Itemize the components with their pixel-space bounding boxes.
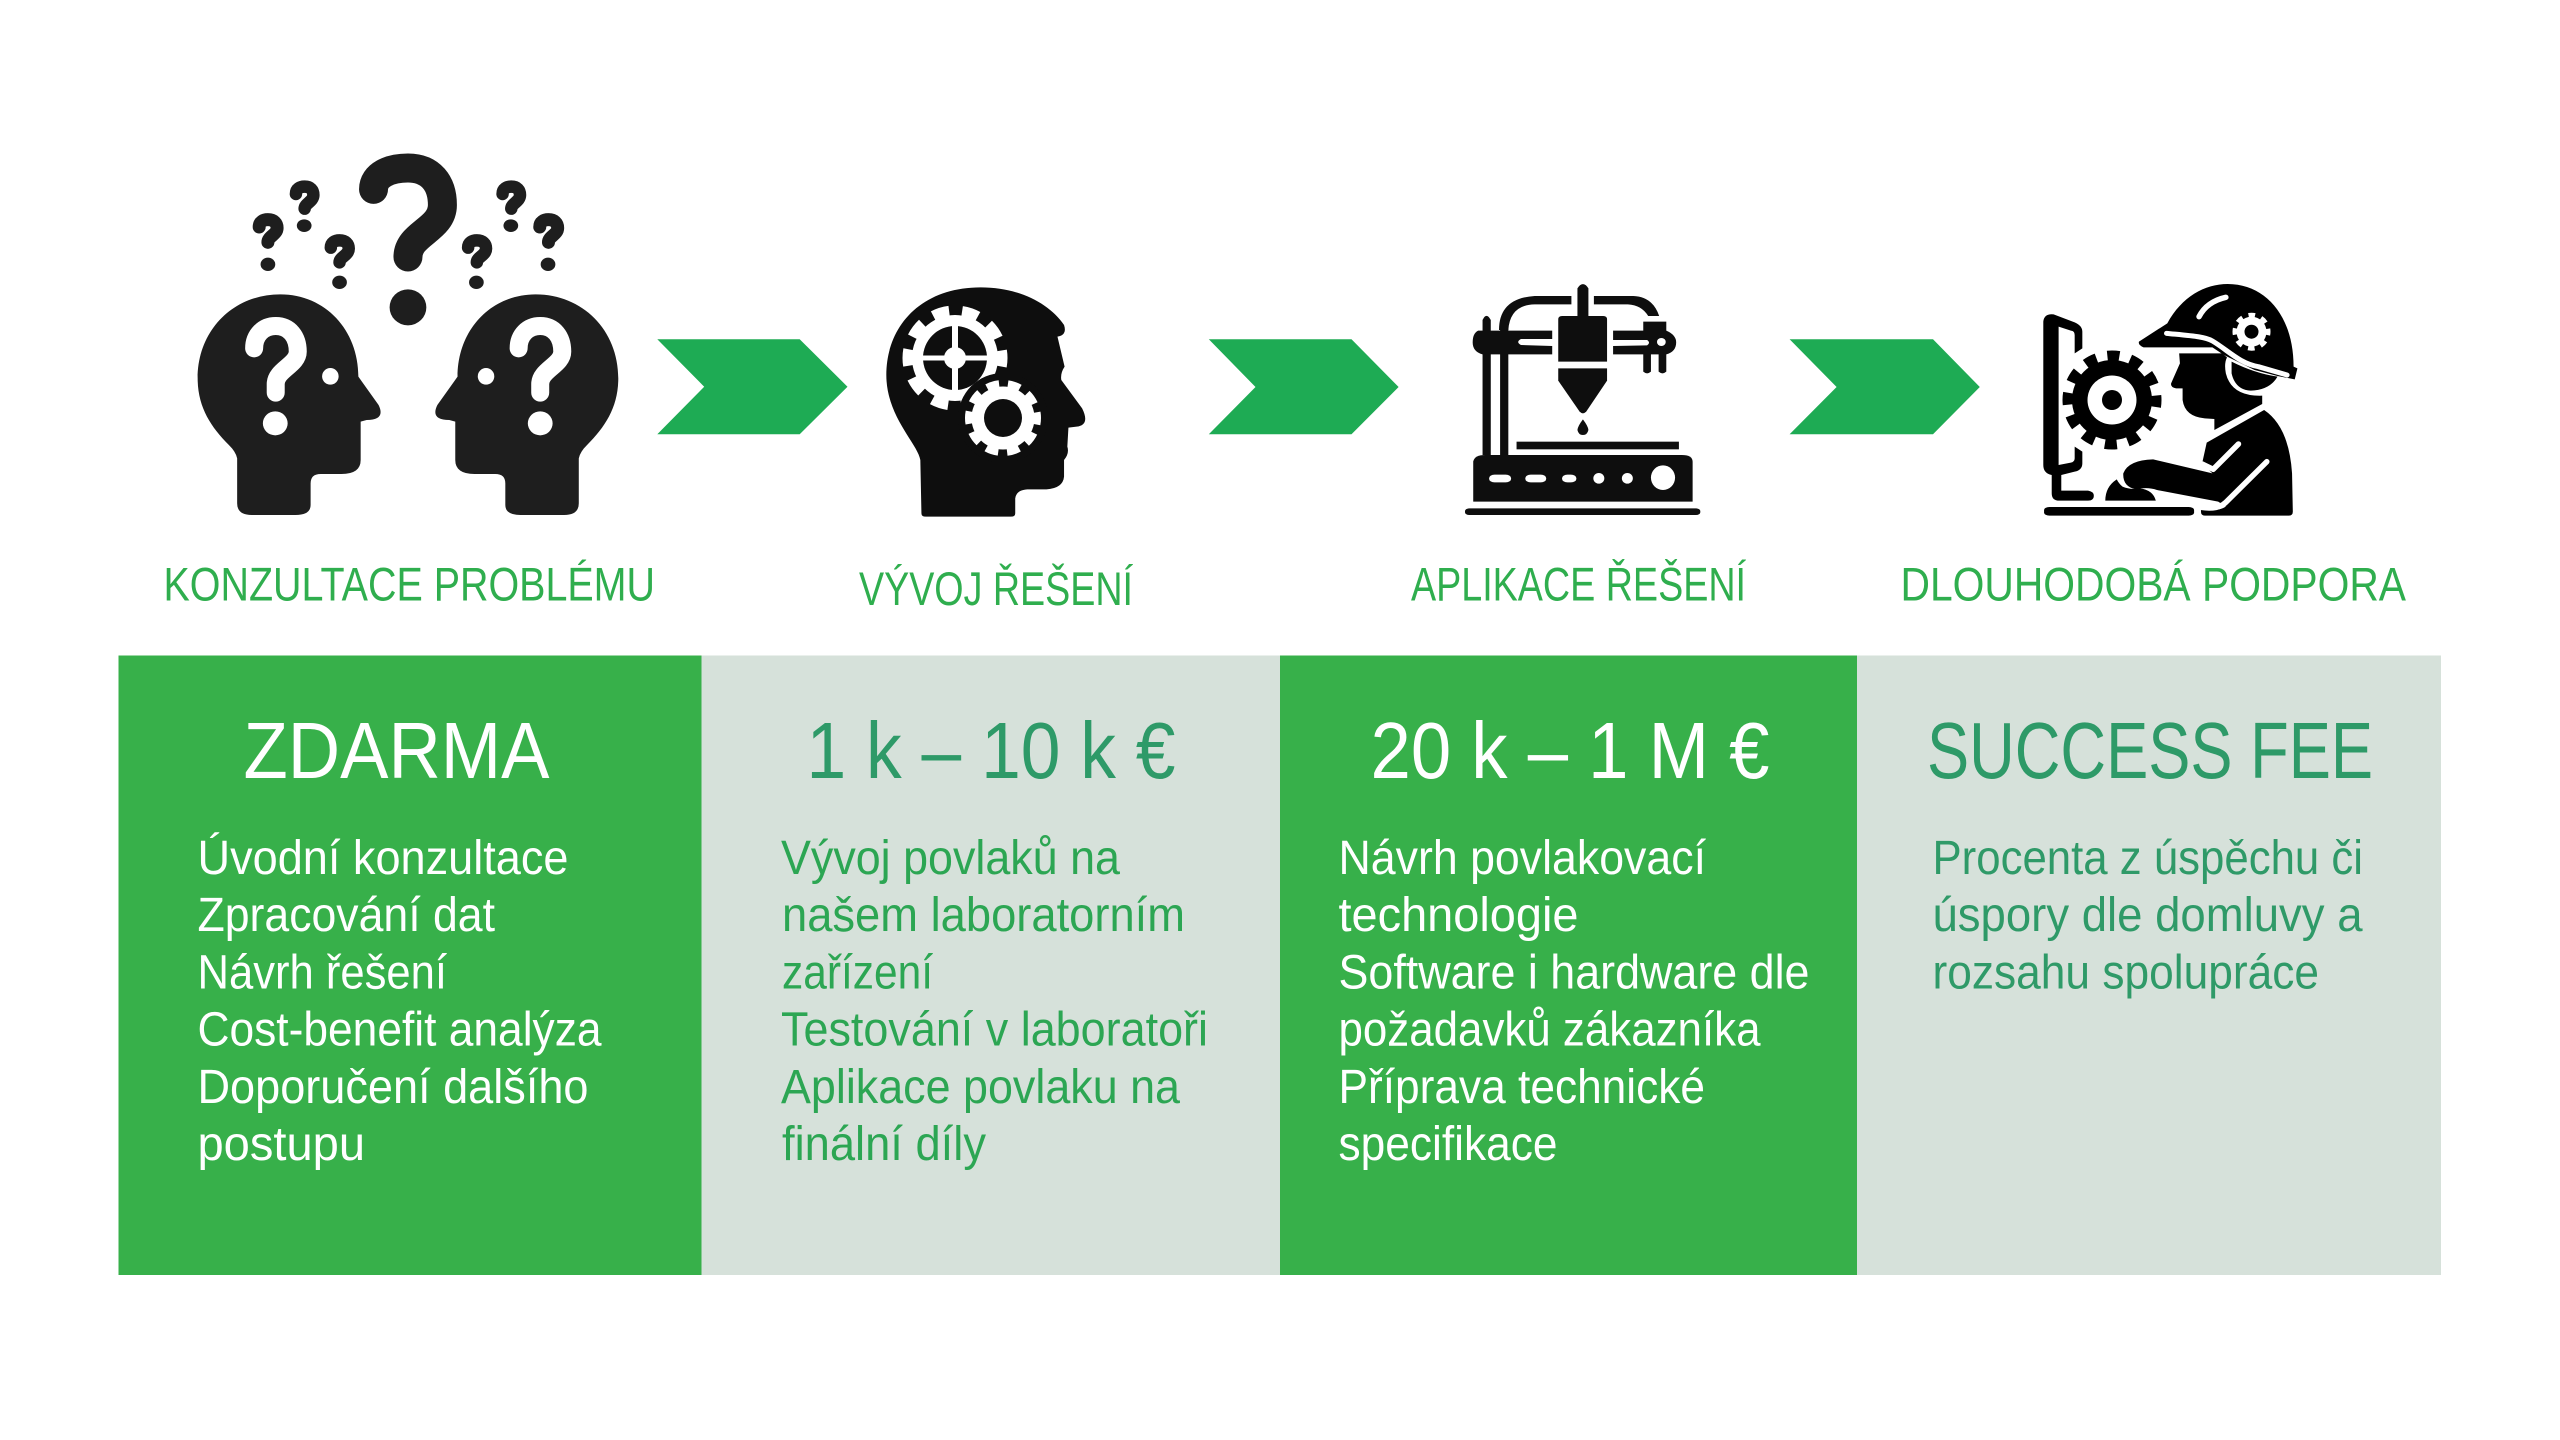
services list: Návrh řešení [198,946,448,999]
terms text [1932,832,2363,999]
figure with helmet [2105,284,2297,516]
arrow: step 3 to 4 [1790,339,1980,434]
right head [435,294,618,515]
services list: Vývoj povlaků na [781,832,1120,885]
price heading: 1 k – 10 k € [806,706,1176,795]
helmet gear [2236,316,2268,348]
services list [198,831,602,1171]
print bed [1517,442,1679,449]
panel: success fee [1857,656,2441,1275]
arrow: step 1 to 2 [657,339,848,434]
large question mark [374,168,442,325]
services list: Návrh povlakovací [1338,832,1707,885]
arrow: step 2 to 3 [1209,339,1399,434]
label: KONZULTACE PROBLÉMU: KONZULTACE PROBLÉMU [164,558,655,610]
services list [781,832,1208,1171]
services list: požadavků zákazníka [1338,1004,1761,1057]
head silhouette [886,287,1085,517]
services list: Software i hardware dle [1338,946,1810,999]
large gear [908,311,1002,405]
terms text: úspory dle domluvy a [1932,889,2363,942]
monitor and keyboard [2043,314,2194,516]
price heading: 20 k – 1 M € [1370,706,1770,795]
icon: head with gears [886,287,1085,517]
gear on screen [2068,356,2156,444]
services list: Testování v laboratoři [781,1004,1208,1057]
icon: 3D printer [1465,284,1700,515]
price heading: ZDARMA [244,706,550,795]
print head and nozzle [1558,284,1607,435]
printer base [1465,455,1700,515]
icon: engineer at computer [2043,284,2297,516]
panel: 20k-1M [1280,656,1857,1275]
icon: two heads with question marks [198,168,618,515]
services list: Příprava technické [1338,1061,1705,1114]
panel: 1k-10k [702,656,1280,1275]
services list: našem laboratorním [782,889,1185,942]
services list: technologie [1338,889,1578,942]
left head [198,294,381,515]
services list: Cost-benefit analýza [198,1004,602,1057]
services list [1338,832,1810,1171]
small question marks [259,187,558,289]
services list: finální díly [782,1118,986,1171]
frame and gantry [1473,296,1676,455]
terms text: rozsahu spolupráce [1932,946,2319,999]
services list: Zpracování dat [198,889,495,942]
price heading: SUCCESS FEE [1927,706,2373,795]
label: DLOUHODOBÁ PODPORA: DLOUHODOBÁ PODPORA [1900,558,2407,610]
label: APLIKACE ŘEŠENÍ: APLIKACE ŘEŠENÍ [1411,558,1746,610]
label: VÝVOJ ŘEŠENÍ: VÝVOJ ŘEŠENÍ [859,562,1133,615]
services list: Doporučení dalšího [198,1061,588,1114]
services list: Aplikace povlaku na [781,1061,1180,1114]
services list: specifikace [1338,1118,1558,1171]
terms text: Procenta z úspěchu či [1932,832,2363,885]
services list: zařízení [782,946,934,999]
small gear [958,373,1048,463]
panel: zdarma [118,656,702,1275]
services list: Úvodní konzultace [198,831,568,885]
services list: postupu [198,1118,365,1171]
